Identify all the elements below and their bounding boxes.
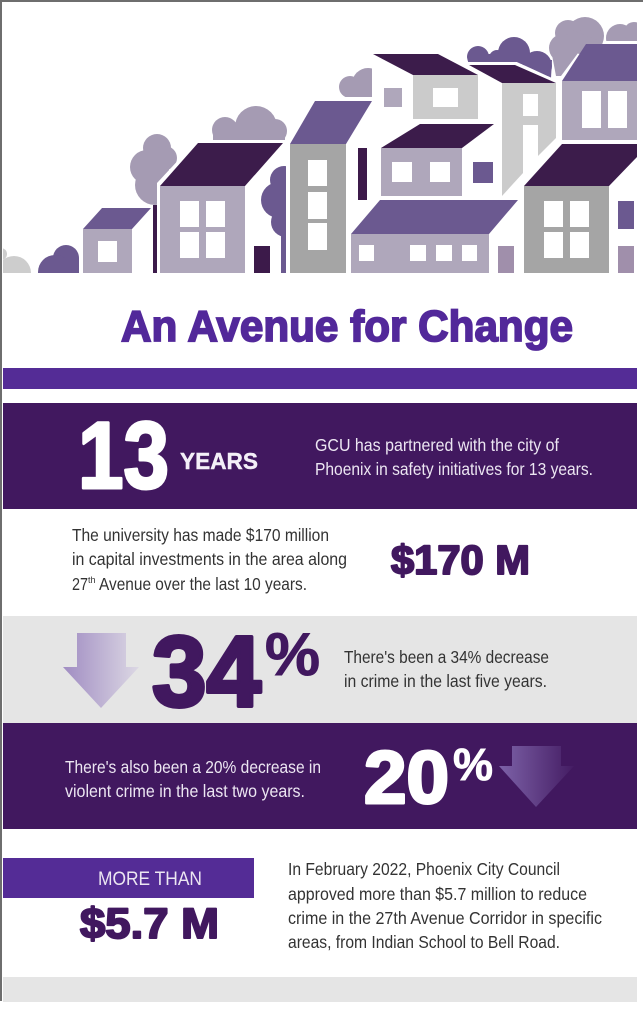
panel: 13 years xyxy=(3,403,637,509)
stat: percent sign: % xyxy=(453,739,493,790)
description: There's also been a 20% decrease in xyxy=(65,757,321,777)
stat label: years: YEARS xyxy=(180,448,258,474)
description: There's been a 34% decrease xyxy=(344,647,549,667)
panel: 20 percent xyxy=(3,723,637,829)
arrow: down xyxy=(499,746,574,807)
description: The university has made $170 million xyxy=(72,525,329,545)
illustration: neighbourhood skyline xyxy=(0,17,643,290)
panel: more than 5.7 million xyxy=(3,858,602,952)
window block: purple xyxy=(473,162,493,183)
window block: right xyxy=(618,201,634,229)
house: upper xyxy=(373,54,478,119)
cloud: purple xyxy=(467,37,552,81)
description xyxy=(65,757,321,801)
stat: 20: 20 xyxy=(364,736,449,819)
door: dark xyxy=(254,246,270,273)
description: In February 2022, Phoenix City Council xyxy=(288,859,560,879)
door: right xyxy=(618,246,634,273)
stat: 34: 34 xyxy=(152,616,261,728)
description: Avenue over the last 10 years. xyxy=(99,574,307,594)
footer band xyxy=(3,977,637,1002)
description: Phoenix in safety initiatives for 13 years. xyxy=(315,459,593,479)
description: areas, from Indian School to Bell Road. xyxy=(288,932,560,952)
door: mauve xyxy=(498,246,514,273)
stat: 13: 13 xyxy=(78,403,169,509)
description xyxy=(288,859,602,952)
cloud: light xyxy=(212,106,287,140)
house: small xyxy=(83,208,151,273)
description xyxy=(72,525,347,594)
title: An Avenue for Change xyxy=(121,302,573,351)
stat: percent sign: % xyxy=(265,621,320,688)
description: GCU has partnered with the city of xyxy=(315,435,559,455)
arrow: down xyxy=(63,633,139,708)
description: approved more than $5.7 million to reduce xyxy=(288,884,587,904)
tree: light xyxy=(130,134,177,205)
panel: 170 million xyxy=(72,525,530,594)
description: 27 xyxy=(72,574,88,594)
post: dark xyxy=(358,148,367,200)
description xyxy=(344,647,549,691)
house: large left xyxy=(157,140,283,273)
description: in capital investments in the area along xyxy=(72,549,347,569)
tree: upper right xyxy=(549,17,604,76)
description: violent crime in the last two years. xyxy=(65,781,305,801)
description xyxy=(315,435,593,479)
house: upper right xyxy=(562,44,637,140)
house: long xyxy=(351,200,518,273)
post: dark xyxy=(153,205,157,273)
stat: $170 M: $170 M xyxy=(391,537,530,583)
bush: grey xyxy=(3,248,31,273)
panel: 34 percent xyxy=(3,616,637,728)
stat: $5.7 M: $5.7 M xyxy=(80,900,219,948)
title rule xyxy=(3,368,637,389)
house: A-shape xyxy=(469,65,556,196)
description: th xyxy=(88,575,96,585)
cloud: small xyxy=(339,68,372,97)
building: tall xyxy=(290,101,372,273)
label banner xyxy=(3,858,254,898)
house: middle xyxy=(381,124,494,196)
bush: purple xyxy=(38,245,79,273)
label banner: MORE THAN xyxy=(98,869,202,890)
cloud: upper right xyxy=(606,22,637,41)
description: in crime in the last five years. xyxy=(344,671,547,691)
tree: purple xyxy=(261,166,286,273)
description: crime in the 27th Avenue Corridor in specific xyxy=(288,908,602,928)
window block xyxy=(384,88,402,107)
house: large right xyxy=(524,144,637,273)
